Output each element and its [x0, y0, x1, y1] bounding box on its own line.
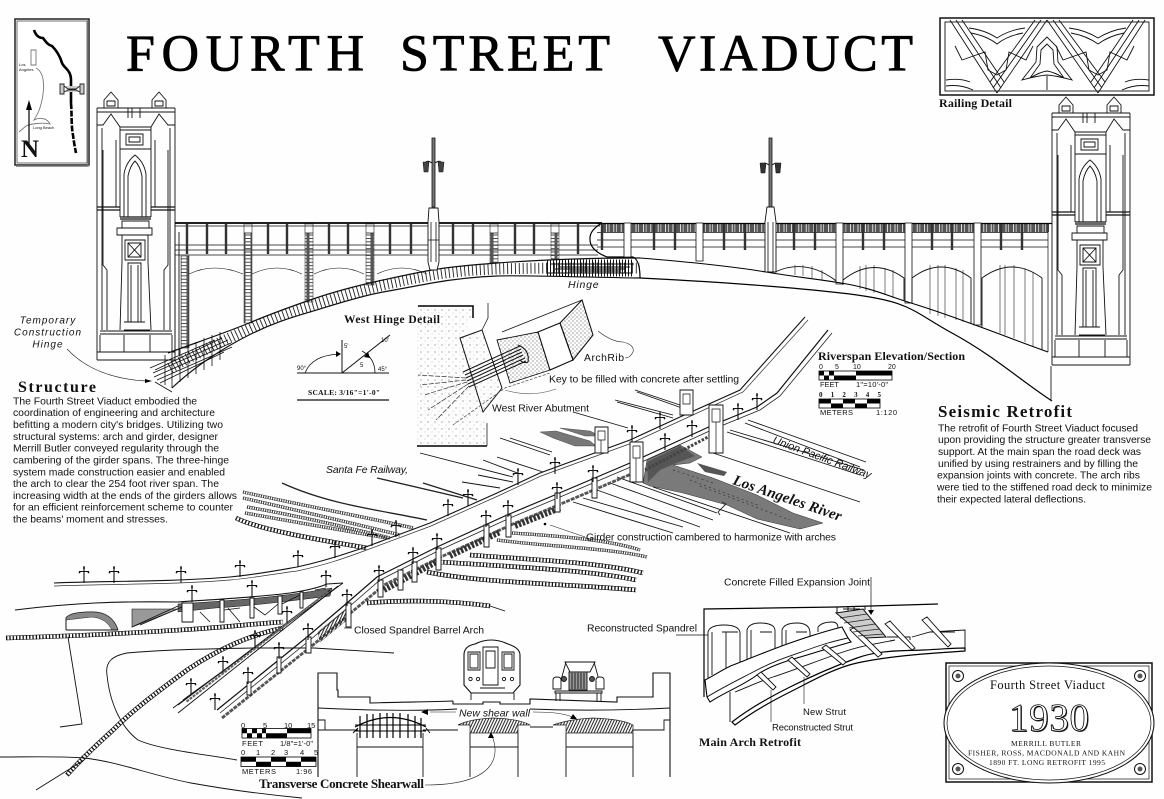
vintage car	[553, 662, 604, 701]
section scale bars: 0	[241, 721, 245, 730]
map inset: Los	[19, 62, 25, 67]
girder label	[544, 523, 836, 544]
main viaduct road deck	[54, 317, 832, 718]
west hinge detail label: West Hinge Detail	[344, 314, 440, 326]
seismic retrofit text: support. At the main span the road deck was	[938, 447, 1141, 458]
section scale bars: 0	[241, 748, 245, 757]
section scale bars: 1	[256, 748, 260, 757]
seismic retrofit text: expansion joints with concrete. The arch ribs	[937, 470, 1140, 482]
temporary construction hinge hatching	[150, 332, 232, 392]
title: STREET	[400, 26, 610, 82]
angle scale diagram: SCALE: 3/16"=1'-0"	[308, 388, 380, 397]
los angeles river water	[540, 428, 823, 529]
union pacific railway label: Union Pacific Railway	[771, 435, 874, 482]
angle scale diagram: 10'	[381, 338, 389, 344]
reconstructed strut label: Reconstructed Strut	[772, 722, 853, 734]
hinge label: Hinge	[568, 279, 599, 291]
plaque	[944, 663, 1154, 783]
structure text: cambering of the girder spans. The three-hinge	[13, 456, 229, 466]
hinge block	[547, 223, 640, 278]
section scale bars: 1:96	[296, 767, 312, 776]
new shear wall label: New shear wall	[459, 708, 531, 720]
riverspan scale bars	[819, 364, 897, 417]
section scale bars: 10	[284, 721, 292, 730]
reconstructed spandrel label: Reconstructed Spandrel	[587, 624, 697, 634]
seismic retrofit text: unified by using restrainers and by filling the	[938, 459, 1138, 470]
temporary construction hinge label	[14, 316, 152, 383]
new shear wall label	[421, 708, 577, 785]
section scale bars: 15	[307, 721, 315, 730]
structure heading: Structure	[18, 379, 96, 396]
title	[126, 26, 913, 82]
plaque: 1930	[1009, 696, 1089, 740]
transverse shearwall label: Transverse Concrete Shearwall	[259, 776, 424, 791]
riverspan scale bars: FEET	[820, 380, 839, 389]
structure text: Merrill Butler conveyed regularity through the	[13, 444, 219, 454]
east lamp post	[760, 138, 781, 272]
transverse section	[318, 673, 670, 777]
seismic retrofit text: their expected lateral deflections.	[937, 494, 1086, 506]
west tower	[97, 92, 175, 360]
structure text: the beams' moment and stresses.	[13, 514, 168, 526]
section scale bars: FEET	[242, 739, 263, 748]
riverspan label: Riverspan Elevation/Section	[818, 349, 965, 363]
temporary construction hinge label: Temporary	[20, 316, 76, 326]
main arch retrofit drawing	[704, 604, 965, 725]
bridge lamps	[79, 393, 762, 710]
angle scale diagram: 45°	[378, 367, 388, 373]
west span deck and railing	[175, 223, 602, 355]
map inset	[15, 19, 89, 166]
bridge piers	[247, 390, 723, 695]
riverspan scale bars: 20	[888, 364, 896, 371]
section scale bars: 5	[314, 748, 318, 757]
angle scale diagram: 90°	[297, 366, 307, 372]
santa fe railway label: Santa Fe Railway,	[326, 465, 408, 476]
title: VIADUCT	[658, 26, 913, 82]
train elevation	[464, 640, 520, 700]
plaque: MERRILL BUTLER	[1011, 739, 1081, 748]
structure text: The Fourth Street Viaduct embodied the	[13, 396, 197, 408]
east tower	[1052, 97, 1130, 365]
section scale bars: 3	[284, 748, 288, 757]
map inset: Long Beach	[33, 125, 54, 130]
new strut label	[803, 677, 846, 718]
west lamp post	[423, 138, 444, 270]
structure text: coordination of engineering and architecture	[13, 408, 215, 419]
structure text: increasing width at the ends of the girders allows	[13, 491, 237, 502]
left ramp	[15, 583, 343, 713]
plaque: FISHER, ROSS, MACDONALD AND KAHN	[968, 748, 1126, 758]
key label: Key to be filled with concrete after settling	[549, 374, 739, 386]
key label	[505, 374, 739, 394]
section scale bars	[241, 721, 318, 776]
structure text: the arch to clear the 254 foot river span. The	[13, 479, 219, 490]
new strut label: New Strut	[803, 707, 846, 718]
section scale bars: 4	[300, 748, 304, 757]
seismic retrofit text: upon providing the structure greater transverse	[938, 435, 1151, 446]
section scale bars: 5	[263, 721, 267, 730]
seismic retrofit text: The retrofit of Fourth Street Viaduct focused	[938, 424, 1138, 434]
railway lines and tracks	[0, 390, 866, 798]
girder label: Girder construction cambered to harmonize with arches	[586, 532, 836, 544]
temporary construction hinge label: Hinge	[32, 340, 64, 350]
railing detail	[940, 18, 1154, 95]
seismic retrofit heading: Seismic Retrofit	[938, 402, 1072, 421]
angle scale diagram: 5	[360, 363, 364, 369]
los angeles river label: Los Angeles River	[730, 472, 844, 525]
map inset: Angeles	[19, 67, 33, 72]
railing detail label: Railing Detail	[939, 96, 1013, 110]
angle scale diagram: 5'	[344, 344, 348, 350]
riverspan scale bars: 10	[853, 364, 861, 371]
structure text	[13, 396, 237, 526]
arch rib label: ArchRib	[584, 353, 624, 364]
west river abutment label: West River Abutment	[492, 404, 589, 414]
riverspan scale bars: 0 1 2 3 4 5	[819, 391, 882, 399]
arch rib label	[584, 331, 633, 364]
title: FOURTH	[126, 26, 364, 82]
east span deck and railing	[597, 223, 1052, 352]
angle scale diagram	[297, 335, 390, 400]
section scale bars: 1/8"=1'-0"	[280, 739, 313, 748]
structure text: system made construction easier and enabled	[13, 468, 225, 478]
structure text: structural systems: arch and girder, designer	[13, 432, 219, 443]
closed spandrel label: Closed Spandrel Barrel Arch	[354, 626, 484, 636]
east arch rib	[640, 258, 1052, 401]
map inset: N	[21, 136, 39, 163]
west arch rib	[168, 258, 640, 388]
temporary construction hinge label: Construction	[14, 328, 82, 338]
plaque: 1930	[1010, 698, 1090, 740]
riverspan scale bars: METERS	[820, 408, 853, 417]
riverspan scale bars: 1:120	[876, 408, 897, 417]
riverspan scale bars: 1"=10'-0"	[856, 380, 888, 389]
section scale bars: 2	[271, 748, 275, 757]
reconstructed strut label	[771, 690, 853, 734]
structure text: befitting a modern city's bridges. Utilizing two	[13, 420, 223, 431]
seismic retrofit text: were tied to the stiffened road deck to minimize	[936, 482, 1152, 494]
plaque: 1890 FT. LONG RETROFIT 1995	[989, 758, 1105, 767]
seismic retrofit text	[936, 424, 1152, 506]
plaque: Fourth Street Viaduct	[990, 678, 1106, 692]
west hinge detail drawing	[417, 300, 593, 446]
concrete filled joint label: Concrete Filled Expansion Joint	[724, 578, 870, 588]
riverspan scale bars: 5	[835, 364, 839, 371]
section scale bars: METERS	[242, 767, 276, 776]
structure text: for an efficient reinforcement scheme to counter	[13, 502, 234, 514]
concrete filled joint label	[724, 577, 874, 615]
main arch retrofit label: Main Arch Retrofit	[699, 735, 801, 749]
riverspan scale bars: 0	[819, 364, 823, 371]
